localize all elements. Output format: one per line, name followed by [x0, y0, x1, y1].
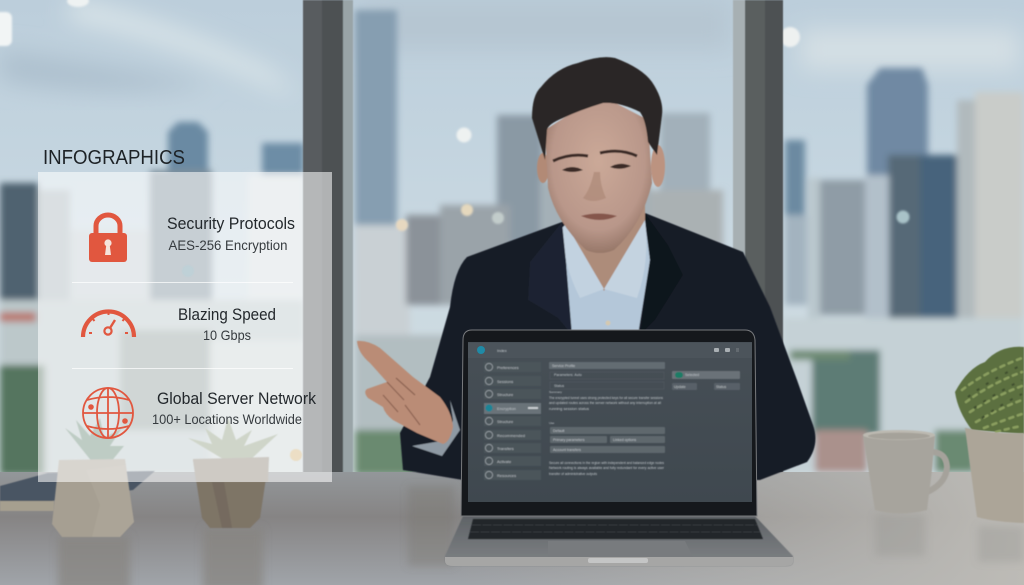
screen right controls [672, 371, 740, 390]
screen main form [549, 362, 665, 476]
screen main form: Secure all connections in the region with independent and balanced edge nodes [549, 461, 664, 465]
screen right controls: Selected [685, 373, 699, 377]
screen sidebar menu: Resources [497, 473, 516, 478]
face [545, 95, 652, 253]
shirt [562, 222, 650, 335]
front notch [588, 558, 648, 563]
eye right [610, 164, 631, 169]
eyebrow right [600, 151, 637, 156]
bokeh lights [0, 0, 910, 231]
divider [72, 282, 293, 283]
screen logo [477, 346, 485, 354]
subtext: locations: 100+ Locations Worldwide [152, 411, 302, 427]
laptop lid [461, 330, 757, 516]
screen main form: Default [553, 429, 564, 433]
screen sidebar menu: Activate [497, 459, 512, 464]
base front edge [445, 557, 793, 566]
screen main form: Status [554, 384, 564, 388]
cuff [412, 400, 460, 456]
heading: blazing speed: Blazing Speed [178, 306, 276, 324]
man [357, 57, 815, 480]
shirt button [606, 320, 610, 326]
icon: padlock [89, 215, 127, 262]
screen main form: Use [549, 421, 555, 425]
heading: global server network: Global Server Network [157, 390, 317, 408]
screen top label: Index [497, 348, 507, 353]
ear left [537, 153, 549, 183]
coffee mug [863, 430, 947, 514]
screen right controls: Status [716, 385, 726, 389]
mouth [581, 214, 617, 220]
item: global server network [83, 388, 317, 438]
shirt collar left [562, 224, 604, 298]
screen main form: transfer of administrative outputs [549, 472, 597, 476]
screen main form: Linked options [613, 438, 636, 442]
subtext: encryption: AES-256 Encryption [168, 237, 288, 253]
notebook on table [0, 471, 155, 511]
screen main form: Primary parameters [553, 438, 585, 442]
bokeh on panel lower [290, 449, 302, 461]
reflection shadows on table [58, 486, 1024, 585]
neck [562, 200, 645, 291]
succulent left with pot [52, 418, 134, 537]
laptop base [445, 516, 793, 566]
keyboard [468, 519, 763, 539]
subtext: bandwidth: 10 Gbps [203, 327, 251, 343]
shirt collar right [604, 220, 646, 298]
clouds [0, 0, 1020, 100]
screen top bar [468, 343, 752, 358]
eye left [562, 167, 583, 172]
screen sidebar menu [484, 362, 541, 480]
eyebrow left [553, 155, 588, 161]
screen sidebar menu: Encryption [497, 406, 516, 411]
hair [532, 57, 662, 160]
trackpad [548, 541, 693, 557]
screen main form: The encrypted tunnel uses strong protected keys for all secure transfer sessions [549, 396, 663, 400]
screen sidebar menu: Structure [497, 419, 514, 424]
infographic panel background [38, 172, 332, 482]
lapel right [640, 213, 683, 335]
title: INFOGRAPHICS [43, 147, 185, 169]
screen sidebar menu: Transfers [497, 446, 514, 451]
screen main form: Parameters: Auto [554, 373, 582, 377]
window pillar left [303, 0, 353, 480]
screen right controls: Update [674, 385, 686, 389]
screen top icons [714, 348, 739, 352]
divider [72, 368, 293, 369]
screen main form: Service Profile [552, 364, 575, 368]
screen sidebar menu: Recommended [497, 433, 525, 438]
succulent right with pot [188, 418, 278, 528]
table [0, 472, 1024, 585]
blurred city skyline [0, 10, 1024, 475]
item: blazing speed [83, 306, 276, 343]
heading: security protocols: Security Protocols [167, 215, 295, 233]
ear right [651, 145, 665, 187]
icon: globe [83, 388, 133, 438]
bokeh on panel [182, 265, 194, 277]
icon: speedometer [83, 311, 134, 337]
hand [357, 341, 453, 444]
screen [468, 342, 752, 502]
finger creases [383, 378, 420, 425]
screen main form: Account transfers [553, 448, 581, 452]
jacket [400, 213, 815, 480]
screen sidebar menu: Preferences [497, 365, 519, 370]
nose [583, 172, 606, 201]
screen sidebar menu: Structure [497, 392, 514, 397]
laptop [445, 330, 793, 566]
screen main form: running session status [549, 407, 589, 411]
window pillar right [733, 0, 783, 480]
screen main form: Summary [549, 390, 562, 394]
item: security protocols [89, 215, 295, 262]
screen main form: Network routing is always available and fully redundant for every active user [549, 466, 665, 470]
screen sidebar menu: Sessions [497, 379, 513, 384]
screen main form: and updated routes across the server network without any interruption at all [549, 401, 661, 405]
foliage [955, 347, 1024, 434]
lapel left [528, 222, 572, 335]
pot right [965, 428, 1024, 523]
plant right with pot [955, 347, 1024, 523]
